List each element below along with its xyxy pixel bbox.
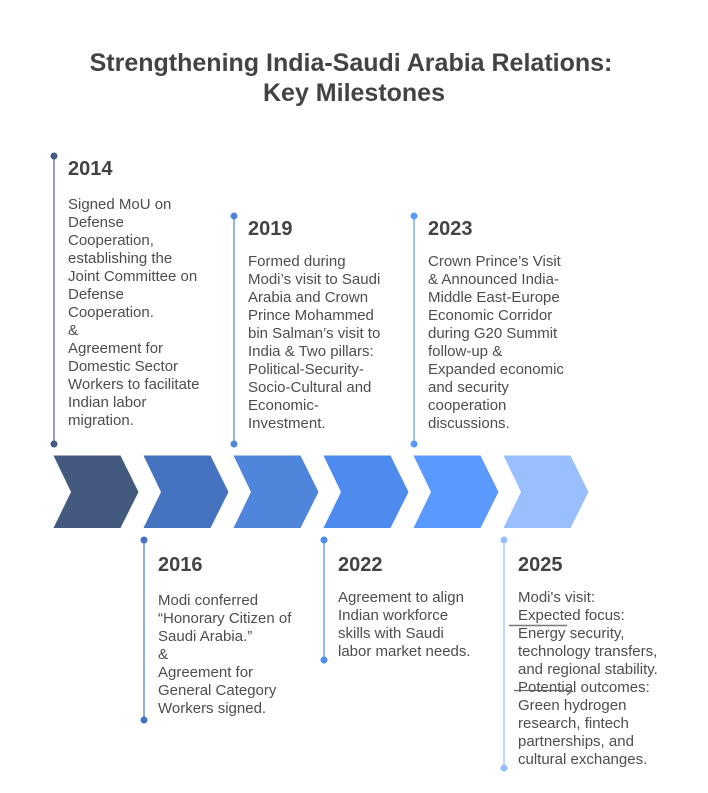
year 2023: 2023 [428,218,472,240]
text 2014: Defense [68,214,124,231]
text 2019: Political-Security- [248,361,364,378]
text 2022: Indian workforce [338,607,448,624]
year 2014: 2014 [68,158,113,180]
text 2023: and security [428,379,509,396]
year 2025: 2025 [518,554,562,576]
text 2023: Crown Prince’s Visit [428,253,562,270]
text 2025: and regional stability. [518,661,658,678]
chevron 2025 [504,456,588,528]
text 2025: technology transfers, [518,643,657,660]
text 2014: establishing the [68,250,172,267]
chevron 2016 [144,456,228,528]
text 2022: Agreement to align [338,589,464,606]
text 2014: Agreement for [68,340,163,357]
milestone 2016 [140,536,296,724]
timeline marker 2025 [500,536,508,772]
text 2014: Domestic Sector [68,358,178,375]
text 2025: Potential outcomes: [518,679,650,696]
text 2025: research, fintech [518,715,629,732]
milestone 2019 [230,212,384,448]
text 2014: Cooperation, [68,232,154,249]
text 2016: Saudi Arabia.” [158,628,252,645]
text 2016: Modi conferred [158,592,258,609]
timeline marker 2023 [410,212,418,448]
text 2025: partnerships, and [518,733,634,750]
text 2023: during G20 Summit [428,325,558,342]
text 2025: cultural exchanges. [518,751,647,768]
text 2014: Defense [68,286,124,303]
milestone 2014 [50,152,204,448]
milestone 2023 [410,212,568,448]
text 2014: migration. [68,412,134,429]
milestone 2025 [500,536,662,772]
text 2023: & Announced India- [428,271,559,288]
text 2019: Socio-Cultural and [248,379,371,396]
text 2023: Expanded economic [428,361,564,378]
chevron 2023 [414,456,498,528]
milestone 2022 [320,536,471,664]
chevron arrow row [54,456,588,528]
timeline marker 2022 [320,536,328,664]
text 2019: Prince Mohammed [248,307,374,324]
text 2023: Economic Corridor [428,307,552,324]
text 2016: “Honorary Citizen of [158,610,292,627]
title: Strengthening India-Saudi Arabia Relations: [90,49,612,77]
text 2016: & [158,646,168,663]
text 2019: bin Salman’s visit to [248,325,380,342]
text 2016: Workers signed. [158,700,266,717]
year 2019: 2019 [248,218,292,240]
text 2025: Energy security, [518,625,624,642]
stray line over expected focus [509,624,567,626]
text 2025: Expected focus: [518,607,625,624]
text 2019: Investment. [248,415,326,432]
text 2016: Agreement for [158,664,253,681]
text 2019: Modi’s visit to Saudi [248,271,380,288]
title: Key Milestones [263,79,445,107]
text 2014: Workers to facilitate [68,376,199,393]
text 2014: Signed MoU on [68,196,171,213]
text 2022: skills with Saudi [338,625,444,642]
text 2022: labor market needs. [338,643,471,660]
chevron 2014 [54,456,138,528]
chevron 2019 [234,456,318,528]
text 2014: Indian labor [68,394,146,411]
text 2023: follow-up & [428,343,502,360]
text 2014: Joint Committee on [68,268,197,285]
timeline marker 2016 [140,536,148,724]
text 2019: Economic- [248,397,319,414]
text 2014: Cooperation. [68,304,154,321]
text 2019: India & Two pillars: [248,343,374,360]
timeline marker 2019 [230,212,238,448]
year 2016: 2016 [158,554,202,576]
text 2014: & [68,322,78,339]
text 2025: Modi's visit: [518,589,595,606]
text 2023: discussions. [428,415,510,432]
text 2016: General Category [158,682,277,699]
text 2019: Formed during [248,253,346,270]
year 2022: 2022 [338,554,382,576]
text 2019: Arabia and Crown [248,289,368,306]
stray arrow over potential outcomes [514,690,572,695]
text 2025: Green hydrogen [518,697,626,714]
title [90,49,612,107]
text 2023: cooperation [428,397,506,414]
text 2023: Middle East-Europe [428,289,560,306]
chevron 2022 [324,456,408,528]
timeline marker 2014 [50,152,58,448]
